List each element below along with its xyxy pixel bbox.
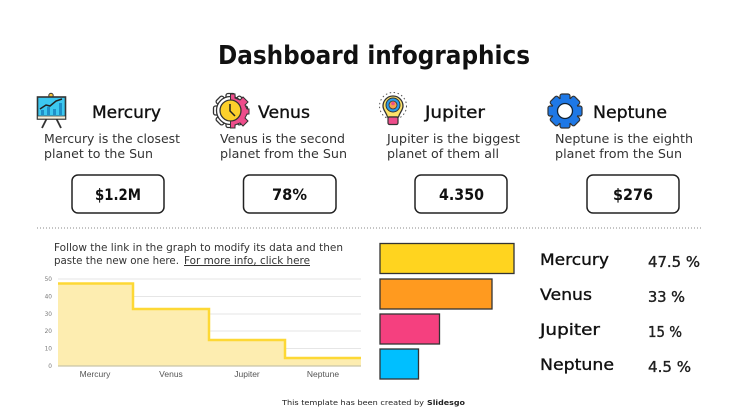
icon: clock gear [214, 94, 249, 128]
text: Neptune description [555, 132, 693, 161]
text: Mercury description: Mercury is the closest [44, 132, 180, 146]
value box: Jupiter [415, 175, 507, 213]
text: Jupiter description [386, 132, 520, 161]
heading: Venus: Venus [258, 103, 310, 122]
chart x axis labels [80, 369, 339, 379]
chart y axis labels [45, 277, 52, 370]
text: Mercury description [44, 132, 180, 161]
icon: blue gear [548, 94, 582, 128]
value box: Jupiter: 4.350 [439, 185, 484, 204]
text: Neptune description: Neptune is the eighth [555, 132, 693, 146]
step area chart [45, 277, 361, 379]
panel: Venus [214, 94, 347, 213]
footer credit [281, 398, 465, 407]
text: chart instructions: For more info, click here [184, 256, 310, 267]
text: chart instructions: Follow the link in the graph to modify its data and then [54, 243, 343, 254]
legend: planet names: Neptune [540, 355, 614, 374]
value box: Neptune [587, 175, 679, 213]
panel: Jupiter [380, 92, 520, 213]
chart y axis labels: 0 [48, 364, 52, 370]
footer credit: Slidesgo [427, 398, 465, 407]
heading: Neptune: Neptune [593, 103, 667, 122]
text: Jupiter description: planet of them all [387, 147, 499, 161]
chart x axis labels: Mercury [80, 369, 111, 379]
legend: planet names: Venus [540, 285, 592, 304]
title: Dashboard infographics [218, 41, 530, 71]
text: Venus description [220, 132, 347, 161]
value box: Mercury [72, 175, 164, 213]
legend: percentages: 33 % [648, 288, 685, 306]
legend: percentages [648, 253, 700, 376]
text: Neptune description: planet from the Sun [555, 147, 682, 161]
chart y axis labels: 10 [45, 346, 52, 352]
value box: Venus: 78% [272, 185, 307, 204]
legend: planet names [539, 250, 614, 374]
legend: planet names: Mercury [540, 250, 609, 269]
bar chart [380, 244, 514, 379]
panel: Neptune [548, 94, 693, 213]
heading: Mercury: Mercury [92, 103, 161, 122]
icon: light bulb [380, 92, 406, 124]
legend: percentages: 4.5 % [648, 358, 691, 376]
text: Venus description: planet from the Sun [220, 147, 347, 161]
text: chart instructions [54, 243, 343, 267]
legend: percentages: 15 % [648, 323, 682, 341]
chart y axis labels: 30 [45, 312, 52, 318]
value box: Neptune: $276 [613, 185, 653, 204]
legend: planet names: Jupiter [539, 320, 600, 339]
chart x axis labels: Venus [159, 369, 183, 379]
chart y axis labels: 50 [45, 277, 52, 283]
text: chart instructions: paste the new one here. [54, 256, 179, 267]
chart y axis labels: 40 [45, 294, 52, 300]
text: Venus description: Venus is the second [220, 132, 345, 146]
panel: Mercury [38, 93, 180, 213]
text: Jupiter description: Jupiter is the biggest [386, 132, 520, 146]
chart x axis labels: Neptune [307, 369, 339, 379]
chart y axis labels: 20 [45, 329, 52, 335]
footer credit: This template has been created by [281, 398, 425, 407]
text: Mercury description: planet to the Sun [44, 147, 153, 161]
icon: presentation chart [38, 93, 66, 128]
legend: percentages: 47.5 % [648, 253, 700, 271]
chart x axis labels: Jupiter [234, 369, 260, 379]
heading: Jupiter: Jupiter [424, 103, 485, 122]
value box: Mercury: $1.2M [95, 185, 141, 204]
